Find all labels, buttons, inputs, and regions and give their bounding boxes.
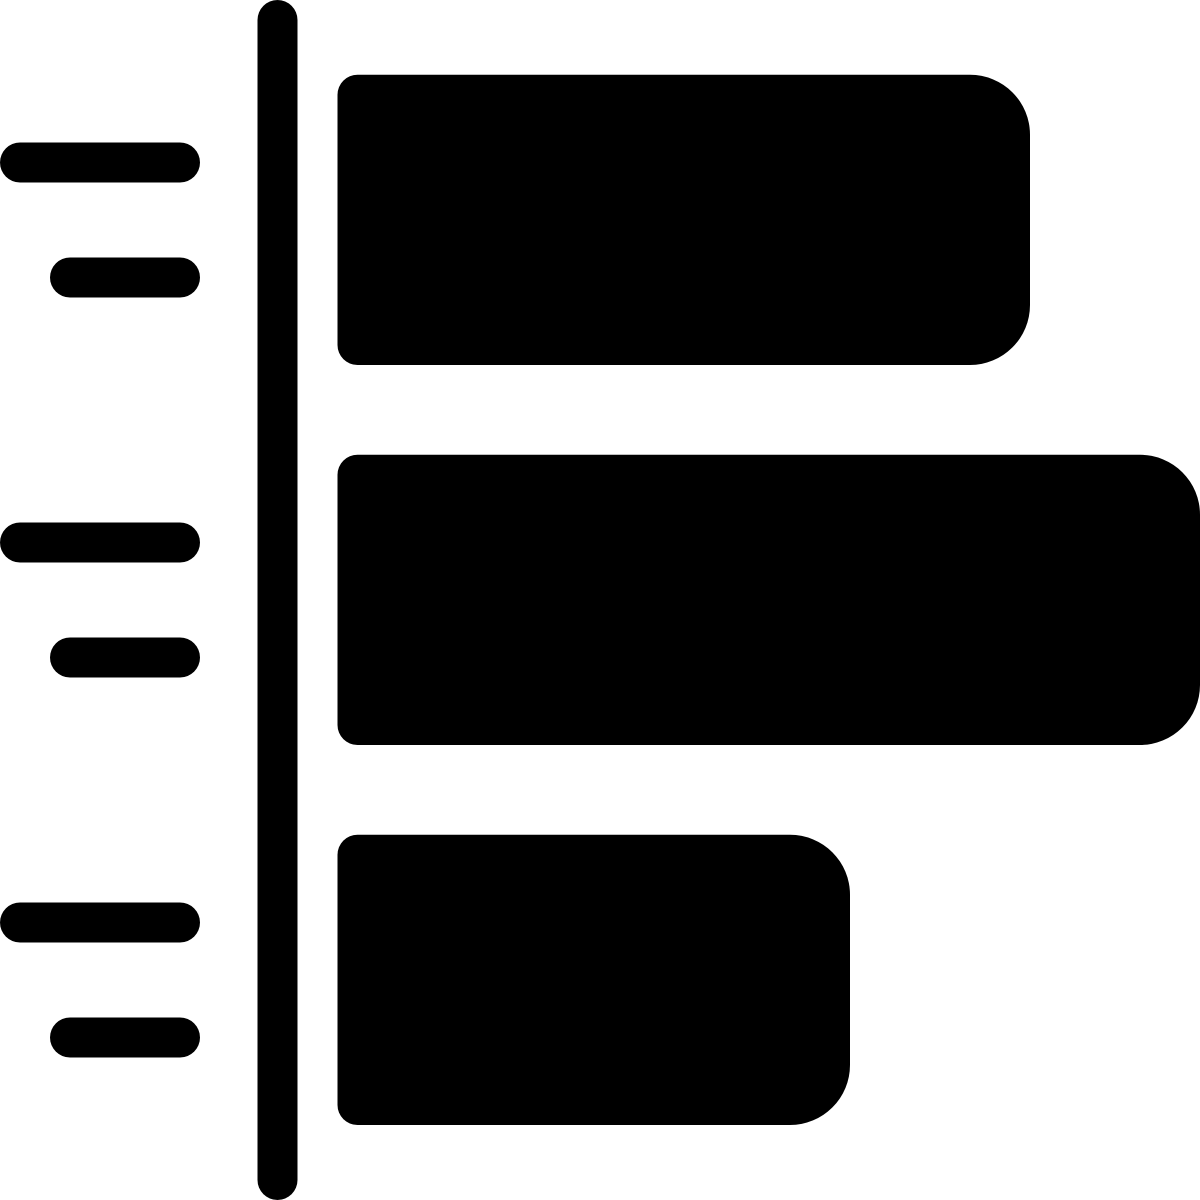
label lines: bar 2 <box>0 522 200 678</box>
label lines: bar 3 <box>0 902 200 1058</box>
bar 2 <box>338 455 1200 745</box>
bar 3 <box>338 835 850 1125</box>
vertical axis <box>258 0 298 1200</box>
bar 1 <box>338 75 1030 365</box>
label lines: bar 1 <box>0 142 200 298</box>
